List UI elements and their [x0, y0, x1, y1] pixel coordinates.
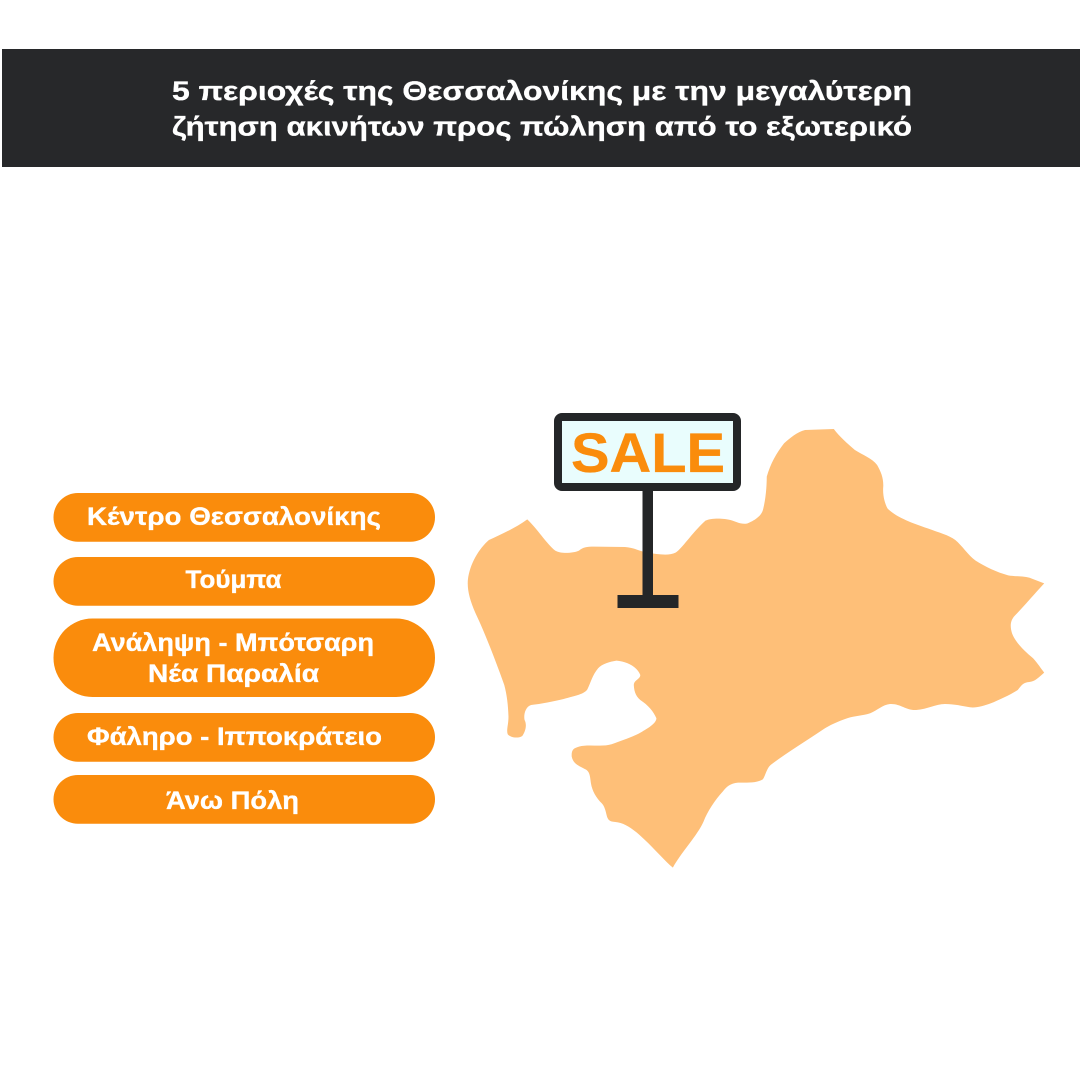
area pill: Ανάληψη - Μπότσαρη, Νέα Παραλία: Ανάληψη - Μπότσαρη	[92, 629, 374, 657]
map of Thessaloniki	[468, 429, 1044, 868]
area pill: Κέντρο Θεσσαλονίκης: Κέντρο Θεσσαλονίκης	[87, 503, 381, 531]
title banner: ζήτηση ακινήτων προς πώληση από το εξωτερικό	[172, 112, 912, 142]
area pill: Φάληρο - Ιπποκράτειο: Φάληρο - Ιπποκράτειο	[87, 723, 382, 751]
icon: sale sign: SALE	[571, 421, 725, 484]
icon: sale sign	[558, 417, 737, 608]
area pill: Τούμπα	[54, 557, 435, 606]
area pill: Ανάληψη - Μπότσαρη, Νέα Παραλία: Νέα Παραλία	[148, 660, 320, 688]
area pill: Τούμπα: Τούμπα	[186, 566, 282, 594]
area pill: Φάληρο - Ιπποκράτειο	[54, 713, 435, 762]
list of areas	[54, 493, 435, 824]
area pill: Ανάληψη - Μπότσαρη, Νέα Παραλία	[54, 618, 435, 697]
title banner	[2, 49, 1080, 167]
title banner: 5 περιοχές της Θεσσαλονίκης με την μεγαλύτερη	[172, 76, 912, 106]
area pill: Κέντρο Θεσσαλονίκης	[54, 493, 435, 542]
area pill: Άνω Πόλη: Άνω Πόλη	[166, 787, 299, 815]
area pill: Άνω Πόλη	[54, 775, 435, 824]
